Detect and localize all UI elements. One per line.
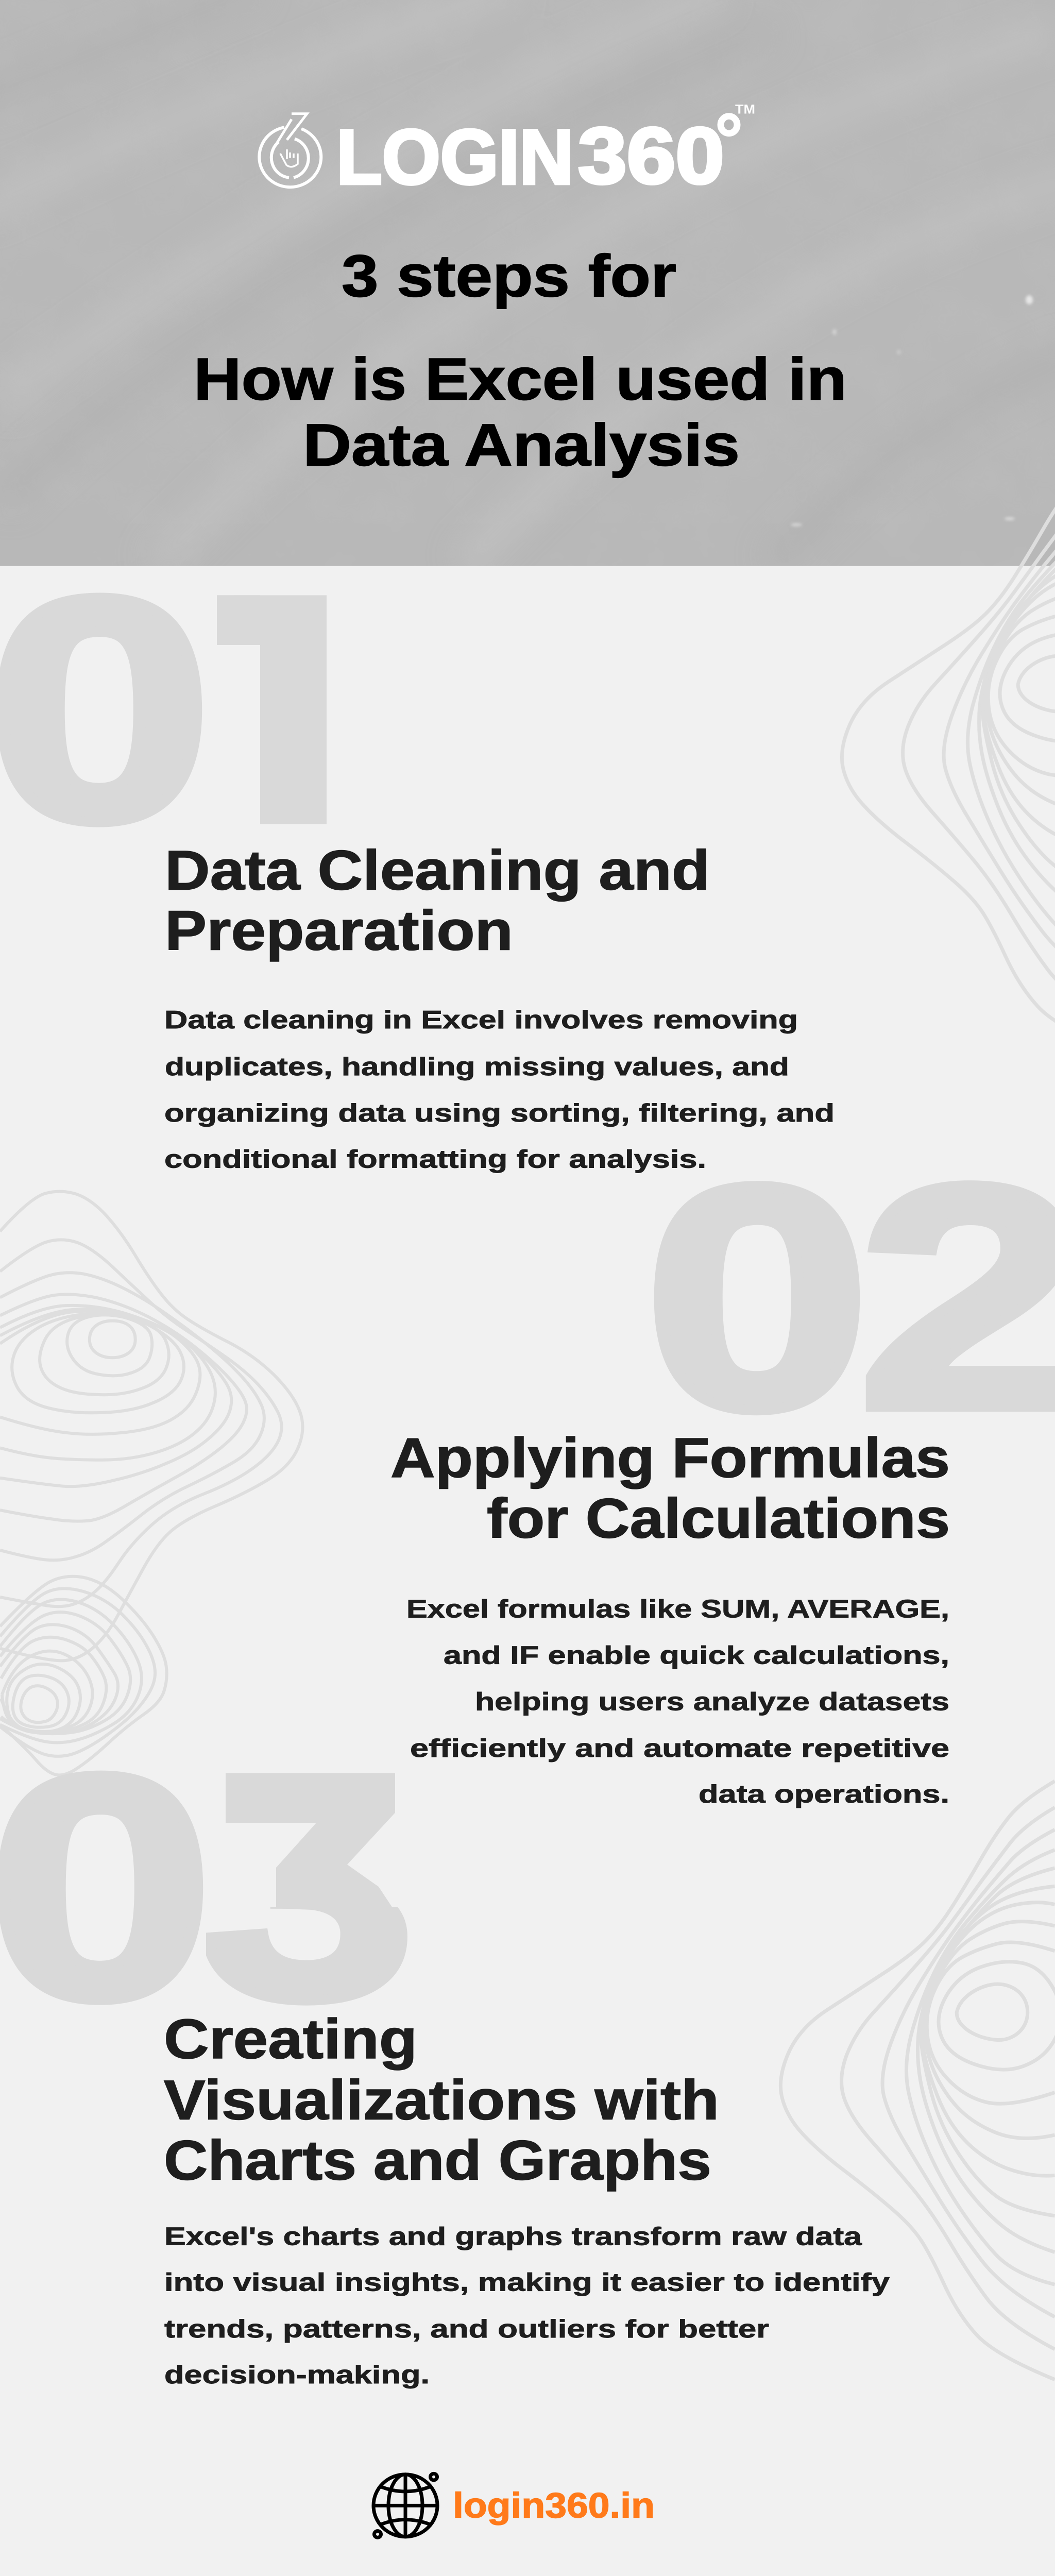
logo: 360 bbox=[578, 112, 724, 200]
step 3 body text: decision-making. bbox=[164, 2361, 430, 2389]
step 1 body text: Data cleaning in Excel involves removing bbox=[164, 1006, 798, 1034]
step 3 heading: Creating bbox=[164, 2008, 417, 2071]
step 1 body text bbox=[164, 1006, 835, 1173]
degree ring bbox=[721, 116, 737, 133]
step number 02: 0 bbox=[644, 1120, 870, 1475]
step 1 heading: Preparation bbox=[165, 900, 513, 962]
trademark: TM bbox=[735, 103, 755, 117]
step 1 heading: Data Cleaning and bbox=[165, 840, 710, 902]
title: Data Analysis bbox=[303, 412, 740, 478]
logo bbox=[259, 103, 755, 200]
step number 03 bbox=[0, 1770, 407, 2005]
step 1 body text: organizing data using sorting, filtering, and bbox=[164, 1099, 835, 1127]
contour lines: left large bbox=[0, 1192, 302, 1660]
step 1 body text: conditional formatting for analysis. bbox=[164, 1145, 706, 1173]
title: 3 steps for bbox=[342, 242, 676, 309]
contour lines: left small bbox=[0, 1577, 167, 1775]
step 2 heading bbox=[390, 1427, 950, 1550]
step 2 body text: helping users analyze datasets bbox=[475, 1688, 949, 1716]
step 2 body text: Excel formulas like SUM, AVERAGE, bbox=[406, 1595, 949, 1623]
step 3 heading bbox=[164, 2008, 719, 2192]
icon: globe bbox=[373, 2473, 437, 2537]
step 2 body text: data operations. bbox=[699, 1781, 949, 1808]
step number 01 bbox=[0, 592, 327, 827]
step 2 heading: for Calculations bbox=[487, 1488, 950, 1550]
logo wordmark: LOGIN bbox=[336, 114, 573, 200]
panel: header texture background bbox=[0, 0, 1055, 566]
step 3 body text bbox=[164, 2223, 890, 2389]
step 3 body text: into visual insights, making it easier to identify bbox=[164, 2268, 890, 2296]
step 2 body text: efficiently and automate repetitive bbox=[410, 1735, 949, 1762]
step 3 heading: Visualizations with bbox=[164, 2069, 719, 2131]
contour lines: top right bbox=[842, 453, 1055, 1052]
step number 03: 3 bbox=[199, 1710, 415, 2064]
step number 02 bbox=[644, 1120, 1055, 1475]
contour lines: bottom right bbox=[780, 1781, 1055, 2380]
step 3 body text: trends, patterns, and outliers for better bbox=[164, 2315, 769, 2343]
title: How is Excel used in bbox=[194, 346, 847, 412]
step 1 heading bbox=[165, 840, 710, 962]
title bbox=[194, 242, 847, 478]
step 2 heading: Applying Formulas bbox=[390, 1427, 950, 1489]
step 1 body text: duplicates, handling missing values, and bbox=[165, 1053, 789, 1081]
website address: login360.in bbox=[453, 2485, 655, 2526]
step number 01: 1 bbox=[145, 532, 416, 886]
step 3 body text: Excel's charts and graphs transform raw data bbox=[164, 2223, 862, 2250]
icon: logo mark bbox=[259, 114, 321, 187]
step 2 body text bbox=[406, 1595, 949, 1808]
step 2 body text: and IF enable quick calculations, bbox=[444, 1641, 949, 1669]
footer bbox=[373, 2473, 655, 2537]
step 3 heading: Charts and Graphs bbox=[164, 2130, 711, 2192]
